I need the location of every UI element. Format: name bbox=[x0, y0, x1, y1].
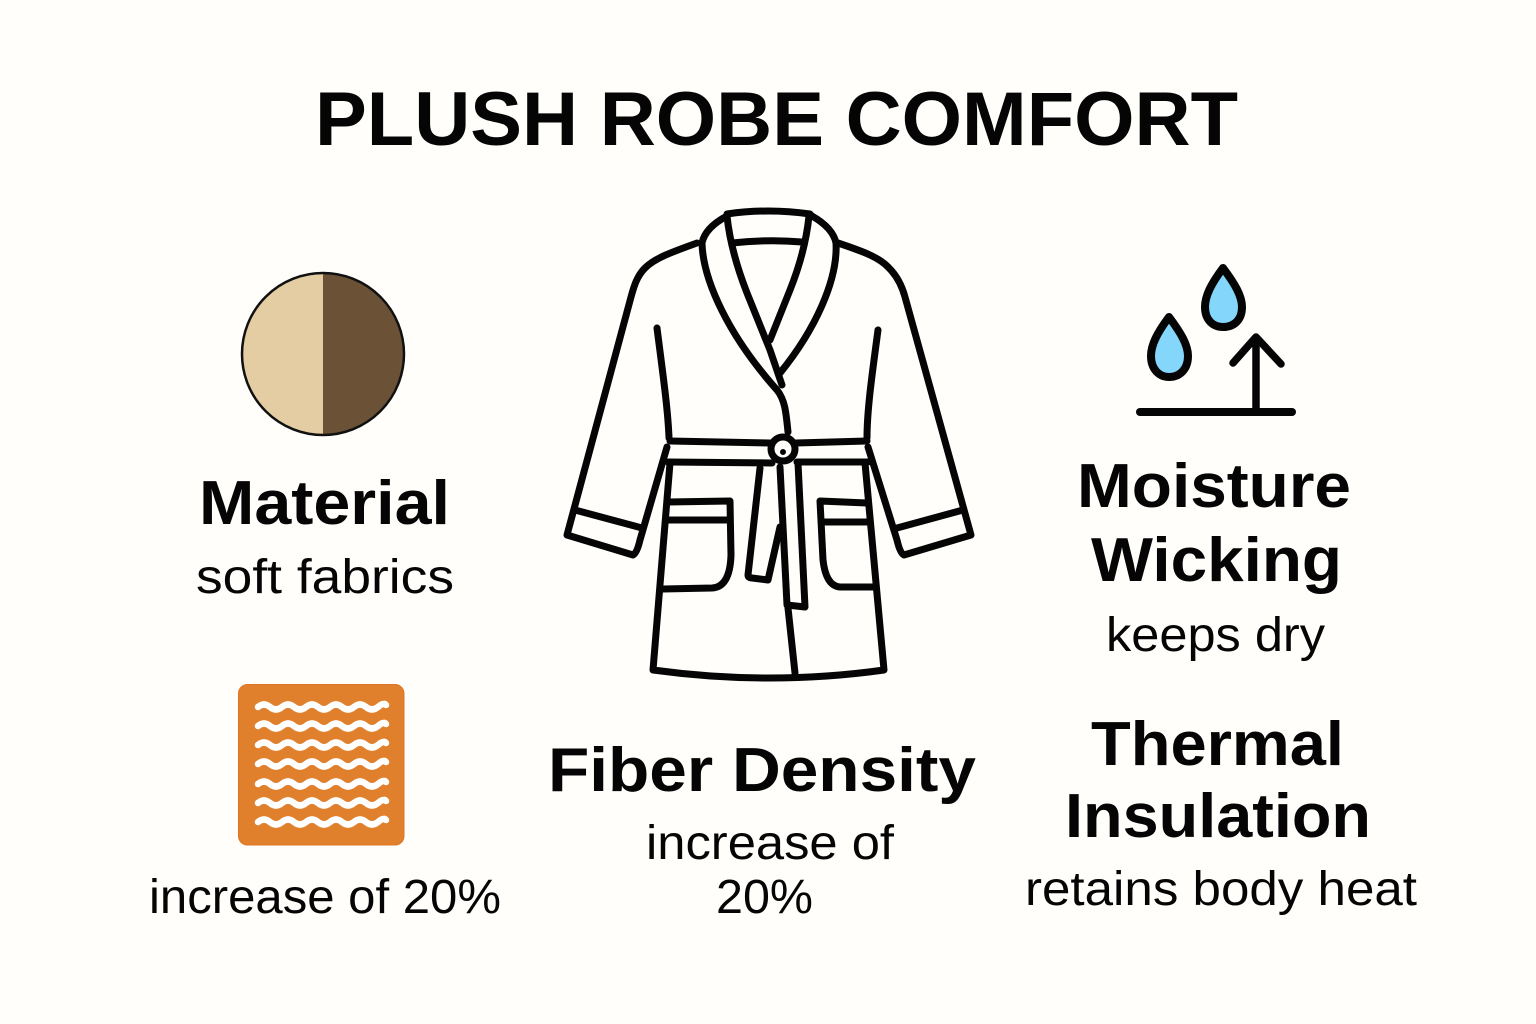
robe belt knot bbox=[771, 437, 795, 461]
robe skirt outline bbox=[653, 463, 884, 678]
robe right pocket bbox=[820, 501, 873, 587]
text: increase of: increase of bbox=[646, 817, 895, 870]
illustration: robe bbox=[567, 211, 971, 678]
robe right lapel inner edge bbox=[770, 216, 809, 340]
robe knot centre bbox=[780, 450, 786, 454]
robe left pocket bbox=[663, 501, 731, 589]
robe center front seam bbox=[788, 608, 795, 673]
icon: two-tone fabric swatch circle bbox=[242, 273, 404, 435]
robe back neck band bbox=[732, 241, 802, 243]
robe belt bbox=[668, 441, 868, 463]
robe right cuff seam bbox=[897, 510, 963, 528]
robe belt left tail bbox=[748, 468, 780, 580]
panel: fiber density swatch bbox=[149, 684, 501, 924]
heading: moisture wicking: Moisture bbox=[1077, 452, 1351, 521]
robe left cuff seam bbox=[575, 510, 642, 528]
robe left armhole seam bbox=[657, 328, 669, 438]
robe left sleeve and shoulder bbox=[567, 243, 697, 555]
panel: thermal insulation bbox=[1025, 710, 1417, 916]
heading: fiber density: Fiber Density bbox=[548, 736, 977, 805]
heading: material: Material bbox=[199, 469, 450, 538]
heading: thermal insulation bbox=[1065, 710, 1371, 851]
robe right sleeve and shoulder bbox=[838, 243, 971, 555]
heading: thermal insulation: Thermal bbox=[1091, 710, 1344, 779]
robe collar top bbox=[727, 211, 810, 214]
heading: moisture wicking: Wicking bbox=[1091, 526, 1342, 595]
text: increase of 20%: increase of 20% bbox=[149, 871, 501, 924]
text: retains body heat: retains body heat bbox=[1025, 863, 1417, 916]
robe belt right tail bbox=[780, 463, 805, 607]
robe right armhole seam bbox=[867, 330, 878, 438]
panel: moisture wicking bbox=[1077, 268, 1351, 662]
heading: moisture wicking bbox=[1077, 452, 1351, 595]
text: keeps dry: keeps dry bbox=[1106, 609, 1325, 662]
text: soft fabrics: soft fabrics bbox=[196, 551, 454, 604]
icon: droplets with upward arrow bbox=[1140, 268, 1292, 412]
text: 20%: 20% bbox=[716, 871, 813, 924]
title: PLUSH ROBE COMFORT bbox=[315, 77, 1238, 162]
heading: thermal insulation: Insulation bbox=[1065, 782, 1371, 851]
icon: orange woven fibers bbox=[238, 684, 404, 845]
panel: material bbox=[196, 273, 454, 604]
robe left lapel inner edge bbox=[727, 216, 782, 385]
robe right lapel outer edge bbox=[780, 216, 836, 373]
robe left lapel outer edge bbox=[702, 216, 788, 432]
